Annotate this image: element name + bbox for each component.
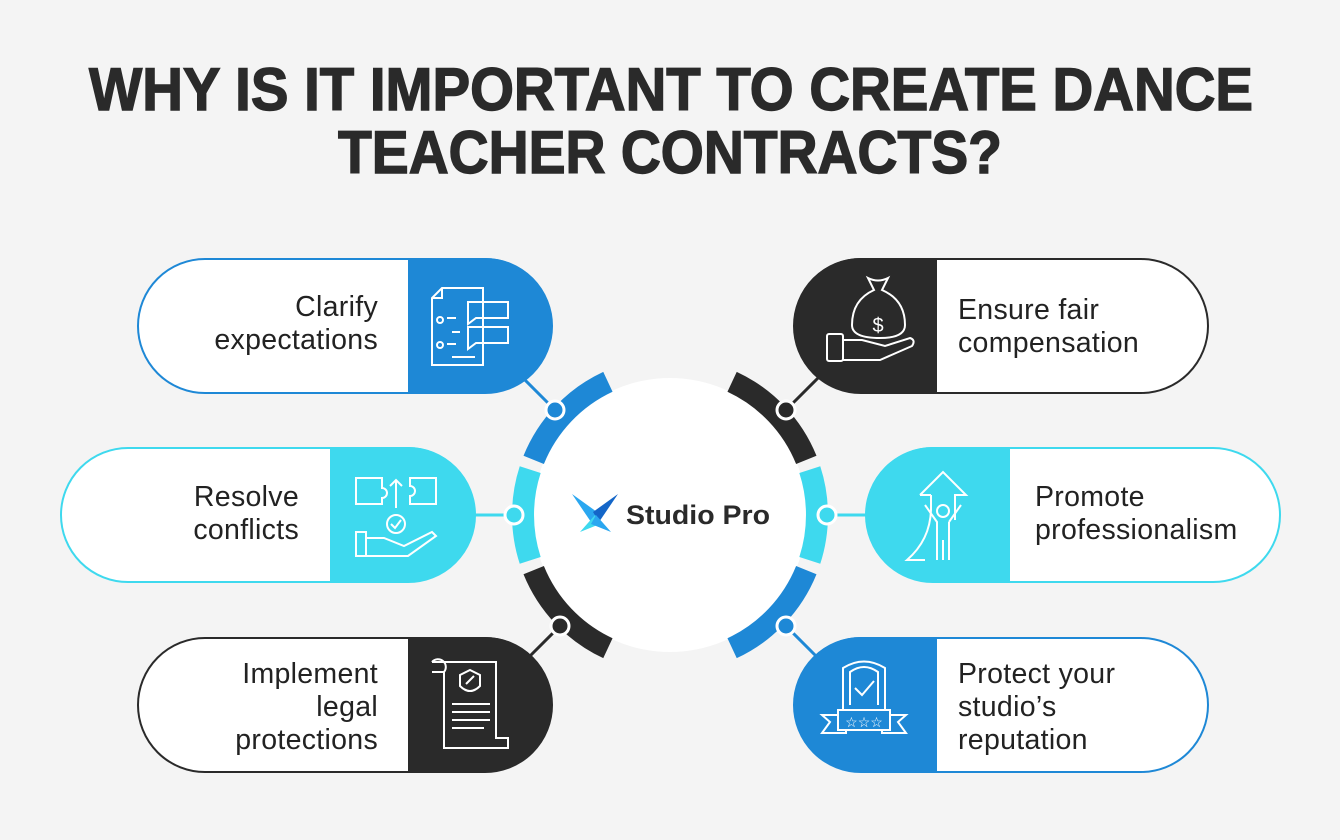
connectors [470, 377, 870, 658]
card: implement legal protections: legal [316, 691, 378, 723]
card: implement legal protections: Implement [242, 658, 378, 690]
card: resolve conflicts: Resolve [194, 481, 299, 513]
title: WHY IS IT IMPORTANT TO CREATE DANCE [89, 56, 1253, 123]
icon: legal scroll [432, 659, 508, 748]
card: protect reputation [794, 637, 1208, 772]
card: promote professionalism: professionalism [1035, 514, 1238, 546]
icon: document with chat [432, 288, 508, 365]
title [89, 56, 1253, 186]
card: resolve conflicts: conflicts [193, 514, 299, 546]
icon: shield badge [822, 662, 906, 733]
card: implement legal protections: protections [235, 724, 378, 756]
card: implement legal protections [138, 637, 552, 772]
card: ensure fair compensation [794, 258, 1208, 393]
icon: money bag in hand: $ [872, 315, 884, 337]
icon: shield badge: ☆☆☆ [845, 714, 883, 730]
logo text: Studio Pro [626, 500, 770, 530]
title: TEACHER CONTRACTS? [338, 119, 1002, 186]
icon: money bag in hand [827, 278, 914, 361]
center circle with logo [523, 378, 817, 652]
dots [505, 401, 836, 635]
card: protect reputation: studio’s [958, 691, 1057, 723]
card: ensure fair compensation: Ensure fair [958, 294, 1099, 326]
card: clarify expectations: Clarify [295, 291, 378, 323]
icon: person with arrow [907, 472, 966, 560]
card: promote professionalism: Promote [1035, 481, 1145, 513]
card: protect reputation: reputation [958, 724, 1088, 756]
card: protect reputation: Protect your [958, 658, 1115, 690]
card: clarify expectations: expectations [214, 324, 378, 356]
icon: puzzle hand [356, 478, 436, 556]
ring segments [523, 382, 817, 648]
logo icon [572, 494, 618, 532]
card: ensure fair compensation: compensation [958, 327, 1139, 359]
card: promote professionalism [865, 447, 1280, 582]
card: resolve conflicts [61, 447, 476, 582]
card: clarify expectations [138, 258, 552, 393]
